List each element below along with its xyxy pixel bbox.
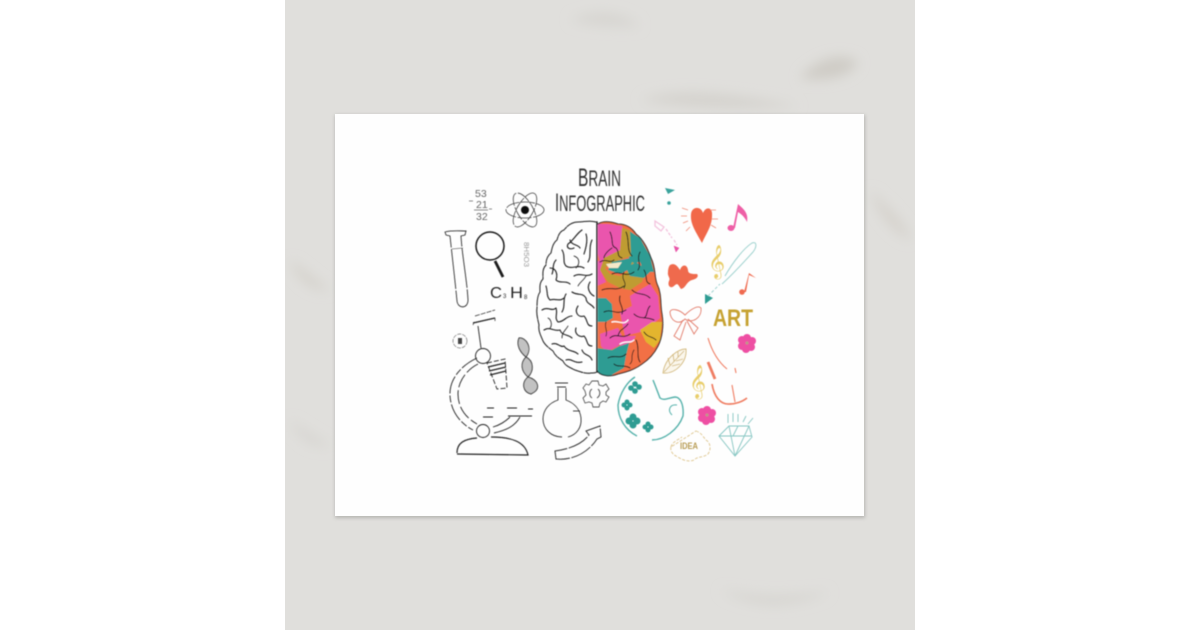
formula: C3H8: C [490,285,502,302]
formula: C3H8: 3 [503,294,507,300]
icon: microscope [450,310,533,455]
white postcard panel [335,114,864,516]
icon: idea cloud: IDEA [680,441,698,451]
brain illustration [537,220,667,380]
numbers: 53 21 32: 21 [476,199,488,211]
icon: round flask [543,383,581,437]
icon: treble clef small: 𝄞 [689,365,706,399]
icon: atom [506,190,544,230]
icon: orange music note [739,273,756,295]
postcard shadow [335,115,865,518]
right hemisphere: colour patches [597,220,667,380]
icon: idea cloud [671,431,710,461]
icon: gear [583,381,609,407]
marble background [285,0,915,630]
icon: diamond [719,413,753,456]
numbers: 53 21 32 [469,188,492,223]
small vertical formula: 8H5O3 [522,242,529,267]
ART label: ART [713,305,753,332]
numbers: 53 21 32: 32 [476,211,488,223]
icon: pink flower bottom [698,406,716,425]
icon: yellow treble clef: 𝄞 [708,245,725,279]
icon: pink music note [728,204,747,231]
title [555,164,645,217]
icon: DNA helix [518,338,538,394]
icon: ribbon bow [670,307,701,340]
icon: pink brush [655,221,679,252]
formula: C3H8: H [510,285,523,302]
numbers: 53 21 32: 53 [475,188,487,200]
title: BRAIN [578,164,621,192]
right hemisphere: fold lines [598,222,663,376]
icon: orange paint splat [668,264,698,289]
left hemisphere: line art [537,221,598,373]
icon: violin in orange strokes [708,338,747,404]
icon: pink flower top [738,334,756,353]
formula: C3H8 [490,285,528,302]
icon: painter palette [618,377,683,440]
icon: teal paint brush [705,243,756,304]
title: INFOGRAPHIC [555,189,645,217]
icon: magnifying glass [476,232,504,277]
icon: heart [681,208,718,243]
icon: small cell [453,334,467,348]
small teal marks [665,188,675,205]
icon: test tube [445,231,468,307]
formula: C3H8: 8 [524,295,528,301]
icon: leaf [663,349,686,373]
icon: curved arrow [555,426,601,459]
